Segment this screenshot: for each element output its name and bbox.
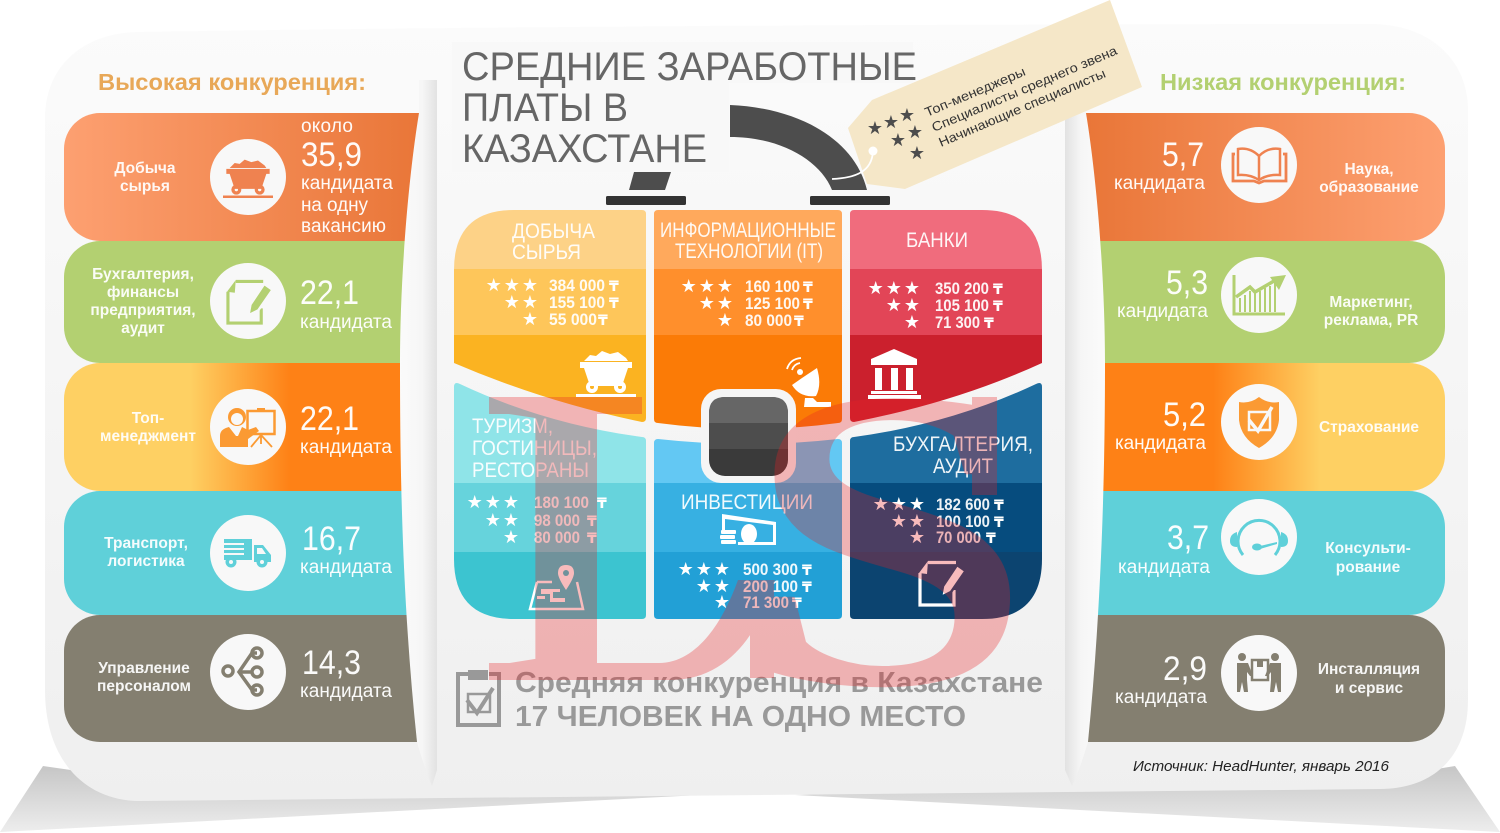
salary panel: accounting and audit: БУХГАЛТЕРИЯ, — [893, 433, 1033, 456]
salary panel: tourism: ₸ — [587, 514, 597, 530]
row: mining: на одну — [301, 195, 368, 216]
salary panel: accounting and audit: ₸ — [994, 498, 1004, 514]
salary panel: investments: 71 300 — [743, 594, 789, 612]
watermark logo: S — [745, 300, 1032, 776]
row: top management: кандидата — [300, 437, 392, 458]
row backgrounds left — [64, 113, 419, 742]
salary panel: investments: ★★ — [696, 576, 732, 597]
row: science: образование — [1319, 179, 1419, 196]
salary panel: mining: ★★★ — [486, 275, 540, 296]
price tag legend: ★ — [907, 122, 923, 143]
salary panel: IT: ₸ — [803, 297, 813, 313]
row: consulting: 3,7 — [1167, 519, 1209, 557]
watermark logo: D — [492, 296, 803, 774]
salary panel: mining: ₸ — [609, 279, 619, 295]
salary panel: mining: 55 000 — [549, 311, 597, 329]
salary panel: banks — [850, 210, 1042, 425]
row: installation: кандидата — [1115, 687, 1207, 708]
row: insurance — [1115, 384, 1419, 460]
salary panel: tourism: 80 000 — [534, 529, 580, 547]
icon: bank — [868, 349, 921, 399]
salary panel: mining: ₸ — [609, 296, 619, 312]
salary panel: IT: ТЕХНОЛОГИИ (IT) — [675, 240, 823, 263]
salary panel: tourism: ★ — [503, 527, 521, 548]
floor shadow right — [795, 766, 1500, 832]
row: HR: персоналом — [97, 678, 191, 695]
source: Источник: HeadHunter, январь 2016 — [1133, 758, 1390, 775]
price tag legend: ★ — [899, 105, 915, 126]
row: accounting: предприятия, — [90, 302, 196, 319]
salary panel: accounting and audit: ★★ — [891, 511, 927, 532]
row: top management: 22,1 — [300, 400, 359, 438]
row: accounting — [90, 263, 392, 339]
salary panel: IT: 80 000 — [745, 312, 792, 330]
row: consulting: Консульти- — [1325, 540, 1411, 557]
title — [462, 45, 917, 171]
salary panel: tourism: ₸ — [597, 496, 607, 512]
title backing — [452, 42, 913, 172]
icon: clipboard with check — [458, 670, 499, 725]
row: mining — [114, 116, 393, 237]
salary panel: banks: БАНКИ — [906, 229, 968, 252]
row: marketing: кандидата — [1117, 301, 1208, 322]
salary panel: accounting and audit — [850, 380, 1042, 619]
row: installation: и сервис — [1335, 680, 1403, 697]
floor shadow left — [0, 766, 700, 832]
salary panel: banks: ₸ — [993, 282, 1003, 298]
salary panel: banks: 350 200 — [935, 280, 989, 298]
salary panel: tourism: ТУРИЗМ, — [472, 415, 553, 438]
salary panel: mining: СЫРЬЯ — [512, 241, 581, 264]
salary panel: banks: 71 300 — [935, 314, 980, 332]
salary panel: mining: 384 000 — [549, 277, 605, 295]
title: ПЛАТЫ В — [462, 86, 628, 130]
row: transport — [104, 515, 392, 591]
row: science — [1114, 127, 1419, 203]
left column: high competition — [64, 74, 419, 742]
row: mining: Добыча — [114, 160, 176, 177]
salary panel: accounting and audit: ₸ — [986, 531, 996, 547]
salary panel: investments: ₸ — [802, 580, 812, 596]
row: HR — [97, 634, 392, 710]
row: transport: кандидата — [300, 557, 392, 578]
price tag legend: Начинающие специалисты — [936, 66, 1108, 150]
salary panel: tourism: ₸ — [587, 531, 597, 547]
row: installation — [1115, 635, 1420, 711]
salary panel: banks: ★★★ — [868, 278, 922, 299]
row: consulting: кандидата — [1118, 557, 1210, 578]
salary panel: IT — [654, 210, 842, 435]
watermark logo — [489, 397, 1010, 688]
average competition note: 17 ЧЕЛОВЕК НА ОДНО МЕСТО — [515, 701, 966, 733]
row: HR: 14,3 — [302, 644, 361, 682]
icon: map with pin — [530, 565, 583, 609]
salary panel: tourism: ГОСТИНИЦЫ, — [472, 437, 597, 460]
salary panel: mining: ★★ — [504, 292, 540, 313]
salary panel: investments — [654, 430, 842, 619]
salary panel: IT: ★ — [717, 310, 735, 331]
salary panel: investments: ₸ — [792, 596, 802, 612]
salary panel: investments: ★ — [714, 592, 732, 613]
central panel side shadow right — [1065, 80, 1105, 786]
price tag legend: ★ — [883, 112, 899, 133]
row: marketing: реклама, PR — [1324, 312, 1418, 329]
row backgrounds right — [1086, 113, 1445, 742]
row: marketing: Маркетинг, — [1329, 294, 1413, 311]
row: mining: сырья — [120, 178, 170, 195]
salary panel: investments: 500 300 — [743, 561, 798, 579]
average competition note — [458, 667, 1043, 733]
salary panel: tourism: 98 000 — [534, 512, 580, 530]
heading: low competition: Низкая конкуренция: — [1160, 69, 1406, 95]
row: insurance: 5,2 — [1163, 396, 1206, 434]
row: science: 5,7 — [1162, 136, 1204, 174]
row: marketing: 5,3 — [1166, 264, 1208, 302]
price tag legend — [832, 0, 1142, 189]
salary panel: mining: 155 100 — [549, 294, 605, 312]
row: accounting: аудит — [121, 320, 165, 337]
price tag legend: Топ-менеджеры — [922, 64, 1028, 120]
row: transport: логистика — [107, 553, 185, 570]
salary panel: banks: ₸ — [993, 299, 1003, 315]
row: mining: вакансию — [301, 216, 386, 237]
salary panel: tourism: ★★★ — [467, 492, 521, 513]
heading: high competition: Высокая конкуренция: — [98, 69, 366, 95]
row: installation: Инсталляция — [1318, 661, 1420, 678]
row: top management — [100, 389, 392, 465]
salary panel: IT: ★★★ — [681, 276, 735, 297]
row: HR: Управление — [98, 660, 190, 677]
salary panel: accounting and audit: 100 100 — [936, 513, 990, 531]
salary panel: banks: ★★ — [886, 295, 922, 316]
row: top management: менеджмент — [100, 428, 196, 445]
icon: satellite dish — [787, 358, 831, 407]
salary panel: IT: ₸ — [803, 280, 813, 296]
right column: low competition — [1086, 74, 1445, 742]
average competition note: Средняя конкуренция в Казахстане — [515, 667, 1043, 699]
salary panel: banks: ★ — [904, 312, 922, 333]
salary panel: accounting and audit: ★ — [909, 527, 927, 548]
salary panel: IT: ★★ — [699, 293, 735, 314]
title: КАЗАХСТАНЕ — [462, 127, 707, 171]
salary panel: investments: ₸ — [802, 563, 812, 579]
salary panel: IT: ИНФОРМАЦИОННЫЕ — [660, 219, 836, 242]
price tag legend: ★ — [890, 130, 906, 151]
row: mining: кандидата — [301, 173, 393, 194]
salary panel: IT: ₸ — [794, 314, 804, 330]
salary panel: mining — [454, 210, 646, 425]
suitcase lock — [701, 389, 796, 483]
row: accounting: финансы — [107, 284, 179, 301]
row: consulting — [1118, 499, 1411, 578]
salary panel: accounting and audit: ₸ — [994, 515, 1004, 531]
salary panel: banks: ₸ — [984, 316, 994, 332]
row: accounting: Бухгалтерия, — [92, 266, 194, 283]
central panel side shadow left — [400, 80, 437, 786]
row: consulting: рование — [1336, 559, 1401, 576]
row: top management: Топ- — [132, 410, 164, 427]
salary panel: accounting and audit: ★★★ — [873, 494, 927, 515]
row: accounting: кандидата — [300, 312, 392, 333]
salary panel: investments: ИНВЕСТИЦИИ — [681, 491, 813, 514]
salary panel: tourism — [454, 380, 646, 619]
row: marketing — [1117, 257, 1418, 333]
salary panel: accounting and audit: АУДИТ — [933, 455, 993, 478]
salary panel: mining: ★ — [522, 309, 540, 330]
salary panel: banks: 105 100 — [935, 297, 989, 315]
salary panel: mining: ДОБЫЧА — [512, 220, 595, 243]
price tag legend: ★ — [909, 143, 925, 164]
row: transport: Транспорт, — [104, 535, 188, 552]
row: science: Наука, — [1344, 161, 1394, 178]
row: science: кандидата — [1114, 173, 1205, 194]
salary panel: tourism: РЕСТОРАНЫ — [472, 459, 589, 482]
price tag legend: Специалисты среднего звена — [929, 42, 1120, 135]
row: accounting: 22,1 — [300, 274, 359, 312]
salary panel: IT: 160 100 — [745, 278, 800, 296]
price tag legend: ★ — [867, 118, 883, 139]
salary panel: investments: 200 100 — [743, 578, 798, 596]
row: mining: 35,9 — [301, 136, 362, 174]
salary panel: accounting and audit: 70 000 — [936, 529, 981, 547]
salary panel: IT: 125 100 — [745, 295, 800, 313]
title: СРЕДНИЕ ЗАРАБОТНЫЕ — [462, 45, 917, 89]
suitcase handle — [606, 105, 890, 205]
row: insurance: кандидата — [1115, 433, 1206, 454]
icon: money and coins — [720, 514, 776, 545]
salary panel: mining: ₸ — [598, 313, 608, 329]
row: insurance: Страхование — [1319, 419, 1419, 436]
row: mining: около — [301, 116, 353, 137]
salary panel: tourism: 180 100 — [534, 494, 589, 512]
row: HR: кандидата — [300, 681, 392, 702]
salary panel: investments: ★★★ — [678, 559, 732, 580]
row: transport: 16,7 — [302, 520, 361, 558]
salary panel: accounting and audit: 182 600 — [936, 496, 990, 514]
salary panel: tourism: ★★ — [485, 510, 521, 531]
row: installation: 2,9 — [1163, 650, 1207, 688]
